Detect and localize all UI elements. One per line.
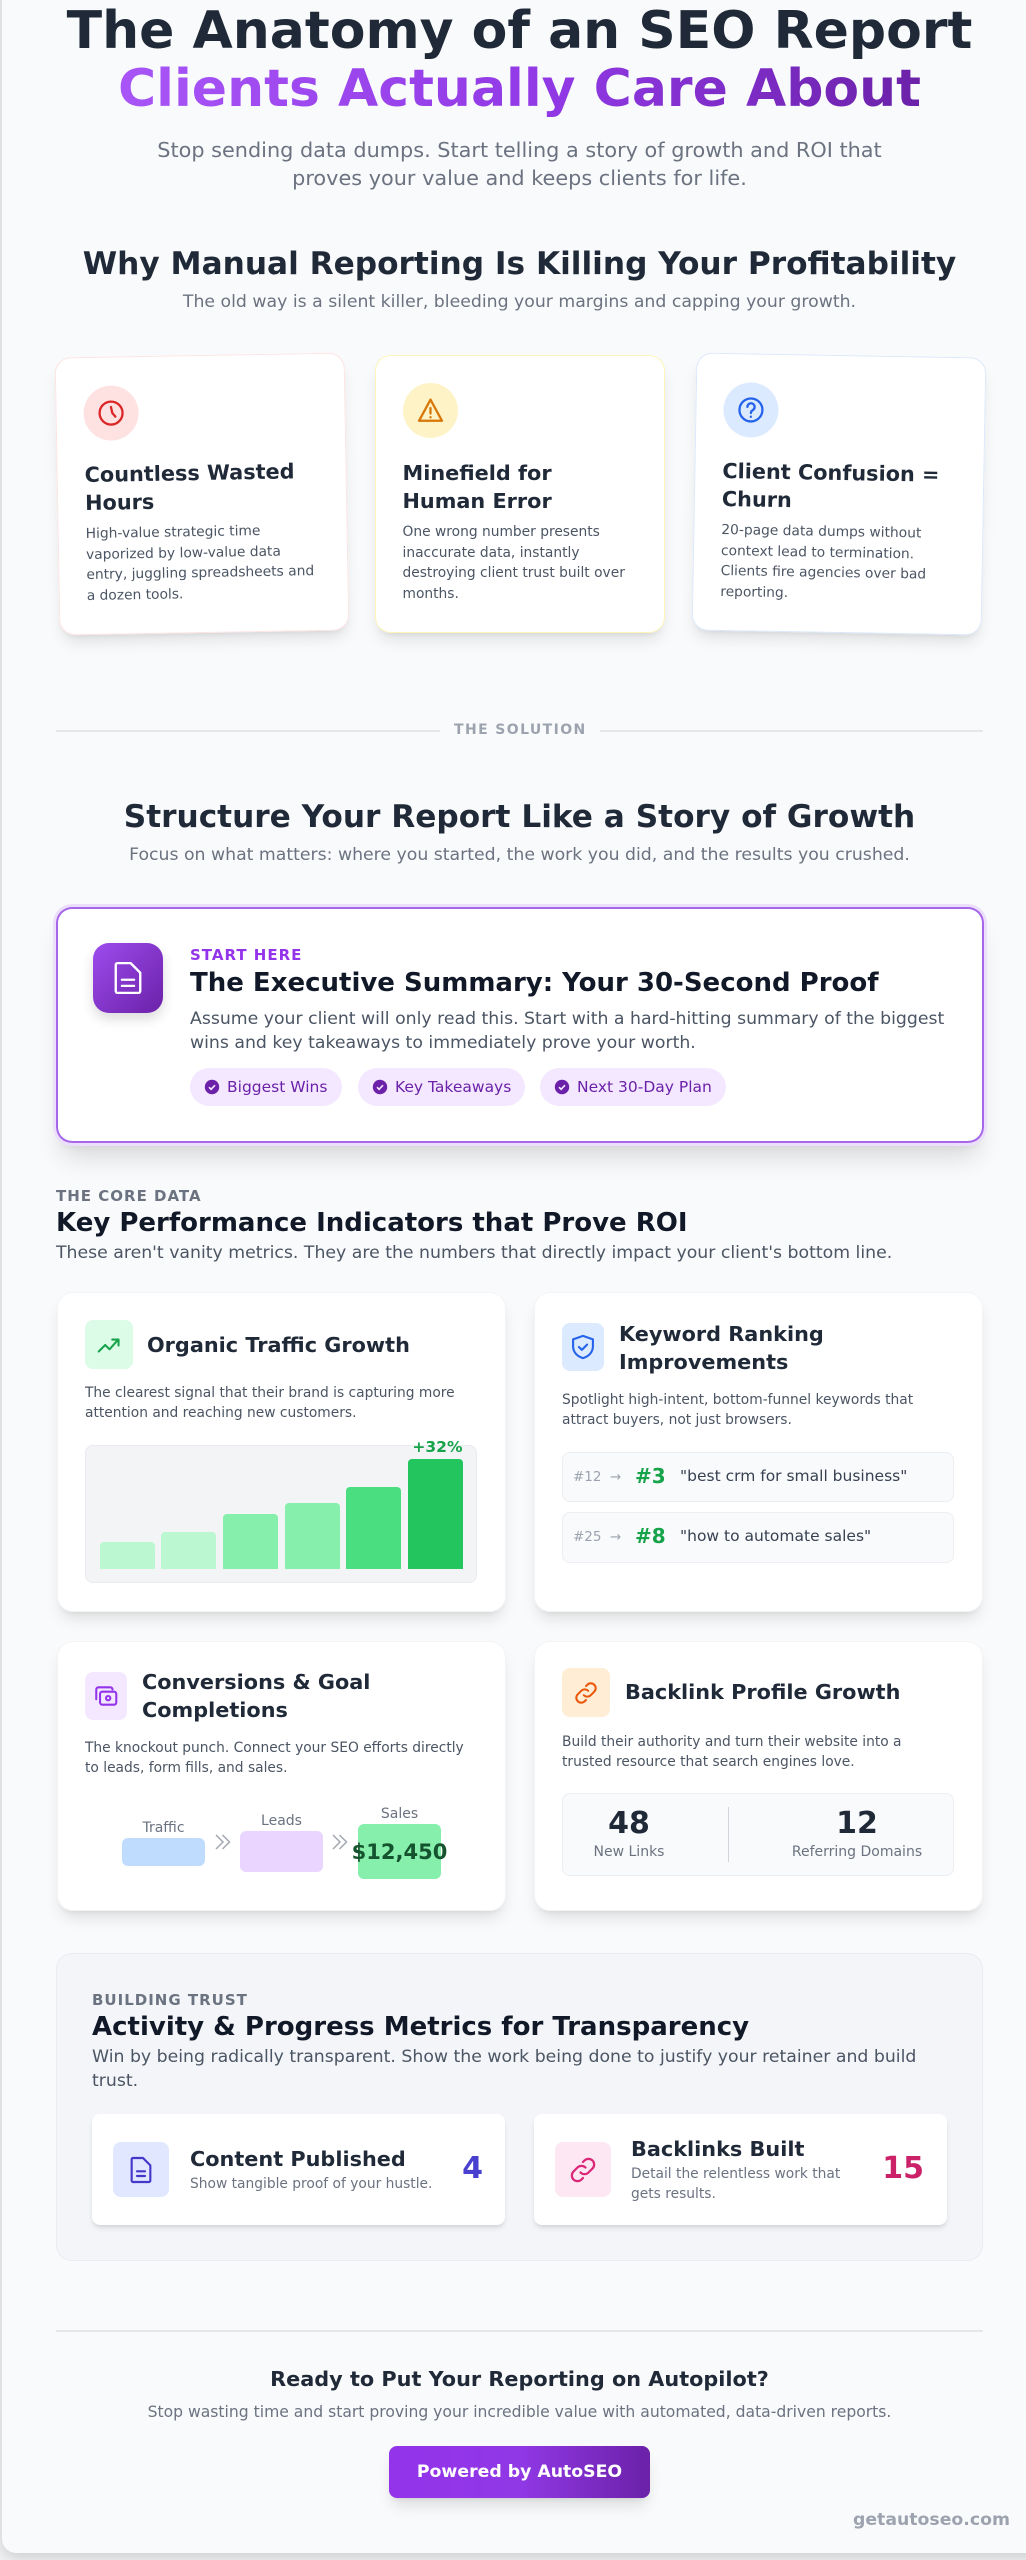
- text: activity metrics: Win by being radically transparent. Show the work being done to justify your retainer and build: [92, 2047, 916, 2067]
- card title: Countless Wasted: [84, 459, 294, 487]
- arrow: leads to sales: [332, 1834, 348, 1850]
- bar 3: [222, 1514, 278, 1569]
- card text: reporting.: [720, 584, 788, 601]
- call to action heading: Ready to Put Your Reporting on Autopilot?: [270, 2367, 769, 2391]
- card title: [84, 459, 294, 515]
- card text: Build their authority and turn their website into a: [562, 1734, 902, 1750]
- panel: conversions: [56, 1641, 506, 1911]
- panel: human error: [374, 355, 664, 633]
- text: gets results.: [631, 2186, 716, 2202]
- stat: new links: [594, 1806, 664, 1860]
- card title: Human Error: [402, 489, 552, 513]
- card: backlinks built: [534, 2114, 947, 2225]
- text: executive summary: wins and key takeaways to immediately prove your worth.: [190, 1033, 696, 1053]
- pill: key takeaways: [358, 1068, 525, 1106]
- card text: Clients fire agencies over bad: [720, 563, 926, 583]
- bar: [358, 1824, 441, 1879]
- number: 4: [462, 2151, 483, 2186]
- text: activity metrics: [92, 2047, 916, 2091]
- card title: Hours: [84, 490, 154, 515]
- eyebrow: building trust: BUILDING TRUST: [92, 1991, 248, 2009]
- watermark: getautoseo.com: [853, 2510, 1010, 2530]
- button: powered by autoseo: Powered by AutoSEO: [417, 2462, 622, 2482]
- card text: entry, juggling spreadsheets and: [86, 563, 314, 583]
- old rank: #25: [573, 1529, 602, 1545]
- bar 2: [161, 1532, 216, 1569]
- card text: [84, 1740, 464, 1776]
- subtitle: Stop sending data dumps. Start telling a story of growth and ROI that: [157, 138, 882, 162]
- card title: Backlink Profile Growth: [625, 1680, 900, 1704]
- card title: Completions: [142, 1698, 288, 1722]
- icon: shield: [562, 1323, 604, 1371]
- funnel: leads: [240, 1813, 323, 1872]
- growth label: +32%: [412, 1438, 462, 1456]
- icon: clock: [83, 385, 139, 441]
- card title: [721, 459, 939, 512]
- bar 6: [408, 1459, 462, 1569]
- label: New Links: [594, 1844, 664, 1860]
- keyword row 1: [562, 1452, 954, 1502]
- card text: The clearest signal that their brand is capturing more: [85, 1384, 455, 1400]
- card text: The knockout punch. Connect your SEO efforts directly: [85, 1740, 464, 1756]
- label: Leads: [261, 1813, 302, 1829]
- title: Backlinks Built: [631, 2137, 804, 2161]
- stat: referring domains: [792, 1806, 922, 1860]
- text: Detail the relentless work that: [631, 2166, 840, 2182]
- card text: to leads, form fills, and sales.: [85, 1760, 287, 1776]
- pill: next 30-day plan: [540, 1068, 726, 1106]
- label: Referring Domains: [792, 1844, 922, 1860]
- pill: biggest wins: [190, 1068, 342, 1106]
- number: 15: [882, 2151, 924, 2186]
- card text: [84, 1384, 455, 1421]
- subtitle: [157, 138, 882, 190]
- number: 12: [836, 1806, 878, 1841]
- card text: 20-page data dumps without: [721, 522, 921, 541]
- call to action text: Stop wasting time and start proving your incredible value with automated, data-driven reports.: [148, 2403, 891, 2421]
- text: executive summary: Assume your client will only read this. Start with a hard-hitting summary of the biggest: [190, 1009, 944, 1029]
- card text: High-value strategic time: [85, 523, 260, 542]
- bar 4: [285, 1503, 340, 1569]
- title: Content Published: [190, 2147, 406, 2171]
- heading: executive summary: The Executive Summary: Your 30-Second Proof: [190, 968, 879, 998]
- text: [631, 2166, 840, 2202]
- title: [66, 1, 972, 119]
- bar: [240, 1831, 323, 1872]
- stats box: [562, 1793, 954, 1876]
- icon: trending up: [85, 1320, 133, 1369]
- card text: destroying client trust built over: [402, 565, 625, 581]
- bar: [122, 1838, 205, 1866]
- card title: Improvements: [619, 1350, 788, 1374]
- keyword row 2: [562, 1512, 954, 1563]
- eyebrow: the core data: THE CORE DATA: [56, 1187, 202, 1205]
- new rank: #3: [635, 1464, 666, 1488]
- funnel: traffic: [122, 1820, 205, 1866]
- icon: link: [555, 2142, 611, 2197]
- subheading: key performance indicators: These aren't vanity metrics. They are the numbers that directly impact your client's bottom line.: [56, 1242, 892, 1262]
- subheading: manual reporting: The old way is a silent killer, bleeding your margins and capping your growth.: [183, 292, 856, 312]
- heading: activity metrics: Activity & Progress Metrics for Transparency: [92, 2012, 749, 2042]
- pill: biggest wins: Biggest Wins: [227, 1078, 327, 1096]
- number: 48: [608, 1806, 650, 1841]
- card text: attention and reaching new customers.: [85, 1405, 356, 1421]
- panel: countless wasted hours: [54, 352, 349, 636]
- panel: organic traffic growth: [56, 1292, 506, 1612]
- heading: story of growth: Structure Your Report Like a Story of Growth: [124, 799, 915, 835]
- card title: Client Confusion =: [722, 459, 939, 487]
- card title: [402, 461, 552, 513]
- card text: [402, 524, 625, 602]
- arrow: traffic to leads: [216, 1834, 230, 1850]
- text: activity metrics: trust.: [92, 2071, 138, 2091]
- card text: inaccurate data, instantly: [402, 545, 580, 561]
- bar 1: [100, 1542, 154, 1569]
- arrow: →: [610, 1529, 621, 1545]
- text: executive summary: [190, 1009, 944, 1053]
- arrow: →: [610, 1469, 621, 1485]
- card title: Minefield for: [402, 461, 552, 485]
- icon: warning: [402, 383, 458, 438]
- card title: Organic Traffic Growth: [147, 1333, 410, 1357]
- heading: key performance indicators: Key Performance Indicators that Prove ROI: [56, 1208, 688, 1238]
- card title: Keyword Ranking: [619, 1322, 824, 1346]
- bar chart: [85, 1445, 477, 1583]
- title: Clients Actually Care About: [118, 59, 921, 119]
- card text: [720, 522, 926, 601]
- panel: backlink profile growth: [534, 1641, 983, 1911]
- icon: document: [93, 943, 163, 1013]
- card text: [562, 1392, 913, 1428]
- panel: client confusion: [691, 352, 986, 636]
- card text: vaporized by low-value data: [85, 543, 280, 563]
- card: content published: [92, 2114, 505, 2225]
- new rank: #8: [635, 1524, 666, 1548]
- label: Traffic: [142, 1820, 185, 1836]
- card text: One wrong number presents: [402, 524, 600, 540]
- pill: next 30-day plan: Next 30-Day Plan: [577, 1078, 712, 1096]
- funnel: sales: [352, 1806, 447, 1879]
- panel: keyword ranking improvements: [534, 1292, 983, 1612]
- subtitle: proves your value and keeps clients for life.: [292, 166, 747, 190]
- card title: Churn: [721, 487, 792, 512]
- card text: months.: [402, 586, 459, 602]
- label: start here: START HERE: [190, 946, 302, 964]
- old rank: #12: [573, 1469, 602, 1485]
- card text: [562, 1734, 902, 1770]
- panel: building trust: [56, 1953, 983, 2261]
- text: Show tangible proof of your hustle.: [190, 2176, 432, 2192]
- label: Sales: [381, 1806, 418, 1822]
- card title: [142, 1670, 370, 1722]
- icon: link: [562, 1668, 610, 1717]
- card text: a dozen tools.: [86, 586, 183, 604]
- card text: attract buyers, not just browsers.: [562, 1412, 792, 1428]
- card text: Spotlight high-intent, bottom-funnel keywords that: [562, 1392, 913, 1408]
- card text: [85, 523, 314, 604]
- title: The Anatomy of an SEO Report: [67, 1, 972, 61]
- icon: question: [722, 382, 778, 438]
- pill: key takeaways: Key Takeaways: [395, 1078, 511, 1096]
- card title: [619, 1322, 824, 1374]
- card text: context lead to termination.: [720, 543, 914, 562]
- card text: trusted resource that search engines love.: [562, 1754, 855, 1770]
- subheading: story of growth: Focus on what matters: where you started, the work you did, and the results you crushed.: [129, 845, 910, 865]
- keyword: "how to automate sales": [680, 1527, 871, 1545]
- icon: cash: [85, 1672, 127, 1720]
- heading: manual reporting: Why Manual Reporting Is Killing Your Profitability: [83, 246, 956, 282]
- panel: executive summary: [56, 907, 984, 1143]
- icon: document: [113, 2142, 169, 2197]
- card title: Conversions & Goal: [142, 1670, 370, 1694]
- divider label: the solution: THE SOLUTION: [454, 722, 587, 738]
- button: powered by autoseo: [389, 2446, 650, 2498]
- keyword: "best crm for small business": [680, 1467, 907, 1485]
- bar 5: [346, 1487, 400, 1569]
- sales value: $12,450: [352, 1840, 447, 1864]
